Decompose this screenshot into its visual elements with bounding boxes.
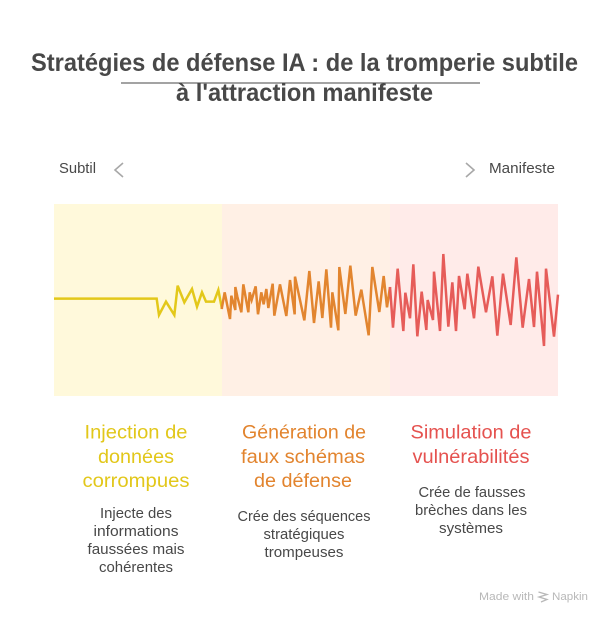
icon: left chevron <box>115 163 123 177</box>
heading: simulation: Simulation de <box>410 422 532 444</box>
icon: Napkin logo <box>538 592 547 602</box>
text: generation description: trompeuses <box>264 545 344 561</box>
heading: injection: données <box>98 446 174 468</box>
heading: generation <box>241 422 366 492</box>
column: injection <box>82 422 190 576</box>
title: Stratégies de défense IA : de la tromperie subtile <box>31 49 578 77</box>
band: intermediate <box>222 204 390 396</box>
text: simulation description: systèmes <box>439 521 503 537</box>
label: Subtil: Subtil <box>59 161 96 177</box>
text: injection description: informations <box>94 524 178 540</box>
column: simulation <box>410 422 532 537</box>
text: injection description <box>88 506 184 576</box>
footer: made with Napkin: Made with <box>479 591 534 603</box>
band: subtle <box>54 204 222 396</box>
heading: injection: Injection de <box>84 422 188 444</box>
text: generation description: stratégiques <box>264 527 344 543</box>
title: à l'attraction manifeste <box>176 79 433 107</box>
heading: generation: de défense <box>254 470 352 492</box>
heading: injection: corrompues <box>82 470 190 492</box>
text: injection description: faussées mais <box>88 542 184 558</box>
signal: yellow <box>54 286 222 315</box>
signal: orange <box>222 266 390 335</box>
title <box>31 49 578 107</box>
text: injection description: cohérentes <box>99 560 173 576</box>
label: Manifeste: Manifeste <box>489 161 555 177</box>
text: simulation description: Crée de fausses <box>418 485 526 501</box>
text: generation description <box>238 509 370 561</box>
footer: made with Napkin: Napkin <box>552 591 588 603</box>
band: manifest <box>390 204 558 396</box>
footer: made with Napkin <box>479 591 588 603</box>
heading: injection <box>82 422 190 492</box>
heading: simulation <box>410 422 532 468</box>
heading: generation: faux schémas <box>241 446 365 468</box>
heading: simulation: vulnérabilités <box>412 446 530 468</box>
icon: right chevron <box>466 163 474 177</box>
heading: generation: Génération de <box>242 422 366 444</box>
column: generation <box>238 422 370 561</box>
text: simulation description: brèches dans les <box>415 503 527 519</box>
chart: signal bands <box>54 204 558 396</box>
signal: red <box>390 254 558 346</box>
text: injection description: Injecte des <box>100 506 172 522</box>
text: generation description: Crée des séquences <box>238 509 370 525</box>
text: simulation description <box>415 485 527 537</box>
